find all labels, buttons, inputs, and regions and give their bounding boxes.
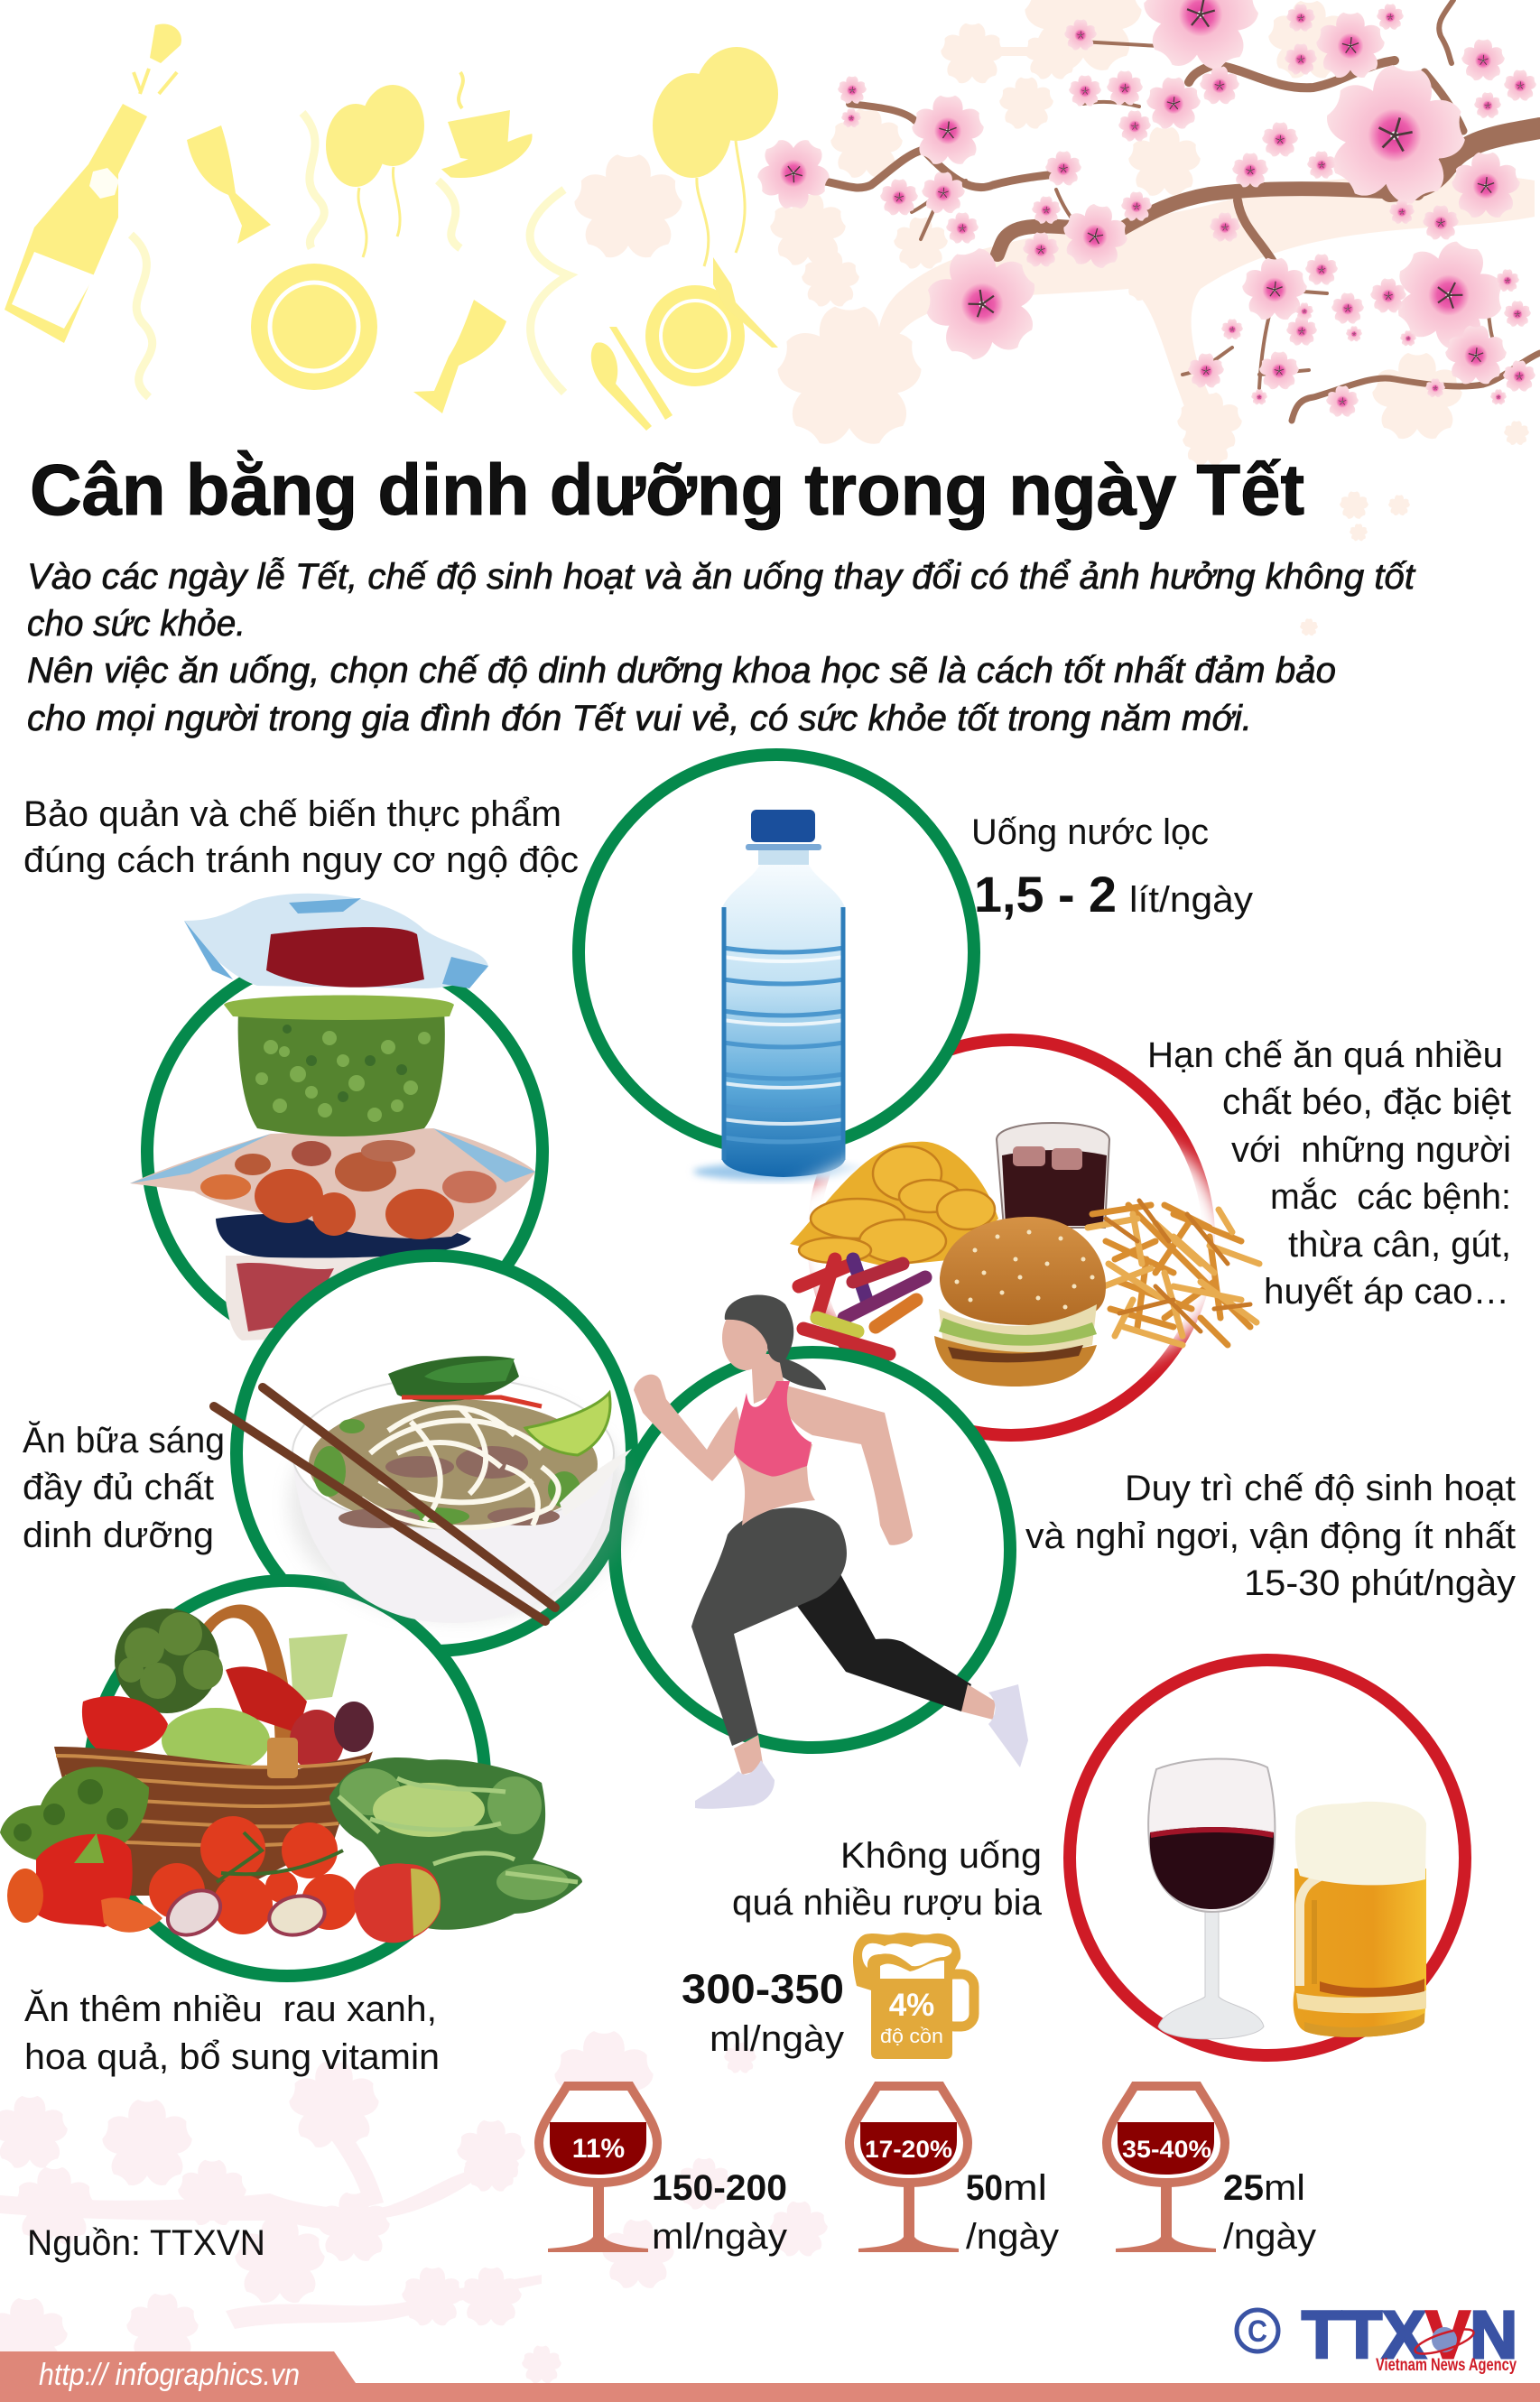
intro paragraph <box>27 556 1416 738</box>
icon: wine glass 17-20%: 17-20% <box>865 2136 952 2163</box>
beer figures: 300-350 <box>682 1966 844 2012</box>
plate left <box>251 264 377 390</box>
pale blossom branch, bottom background <box>0 2031 830 2386</box>
icon: wine glass 17-20% <box>849 2086 968 2252</box>
title: Cân bằng dinh dưỡng trong ngày Tết <box>30 450 1304 530</box>
intro paragraph: cho mọi người trong gia đình đón Tết vui vẻ, có sức khỏe tốt trong năm mới. <box>27 699 1252 738</box>
text: 150-200 ml/ngày: 150-200 <box>652 2168 787 2208</box>
pale streamers <box>131 113 569 397</box>
text: limit fat: mắc các bệnh: <box>1270 1176 1511 1217</box>
text: water: Uống nước lọc <box>971 812 1209 852</box>
photo: wine glass and beer mug <box>1148 1758 1426 2039</box>
text: food storage: đúng cách tránh nguy cơ ngộ độc <box>23 840 579 880</box>
flute <box>413 300 506 413</box>
text: food storage: Bảo quản và chế biến thực phẩm <box>23 794 561 834</box>
bottle <box>5 24 181 343</box>
cherry blossom flowers <box>740 0 1537 419</box>
text: exercise: 15-30 phút/ngày <box>1244 1563 1516 1603</box>
plate right <box>645 285 745 386</box>
ring: vegetables <box>89 1581 485 1976</box>
text: vegetables: Ăn thêm nhiều rau xanh, <box>24 1989 437 2029</box>
cherry blossom branches <box>825 0 1540 421</box>
intro paragraph: Nên việc ăn uống, chọn chế độ dinh dưỡng khoa học sẽ là cách tốt nhất đảm bảo <box>27 651 1336 691</box>
text: food storage <box>23 794 579 880</box>
background: pale blossom shapes top <box>571 0 1535 636</box>
text: 50ml/ngày: ml <box>1003 2168 1047 2208</box>
text: 50ml/ngày: /ngày <box>966 2217 1059 2257</box>
text: 25ml/ngày: /ngày <box>1223 2217 1316 2257</box>
text: water: 1,5 - 2 <box>974 866 1117 923</box>
text: exercise: Duy trì chế độ sinh hoạt <box>1125 1469 1516 1508</box>
icon: wine glass 35-40%: 35-40% <box>1122 2136 1211 2163</box>
text: limit fat: chất béo, đặc biệt <box>1222 1082 1511 1122</box>
text: vegetables <box>24 1989 440 2077</box>
photo: basket of vegetables <box>0 1605 582 1944</box>
text: water: lít/ngày <box>1129 880 1253 920</box>
text: alcohol: quá nhiều rượu bia <box>732 1883 1043 1923</box>
text: 150-200 ml/ngày <box>652 2168 787 2257</box>
photo: runner illustration <box>634 1294 1028 1809</box>
photo: pho bowl with chopsticks <box>214 1356 632 1623</box>
beer figures: ml/ngày <box>710 2019 844 2059</box>
text: 25ml/ngày: ml <box>1264 2168 1305 2208</box>
photo: burger, chips, cola, fries, candy <box>790 1119 1259 1386</box>
logo: copyright and TTXVN: TTXVN <box>1302 2297 1517 2372</box>
text: 25ml/ngày: 25 <box>1223 2168 1264 2208</box>
decorative yellow party icons <box>5 24 778 431</box>
text: 50ml/ngày <box>966 2168 1059 2257</box>
text: exercise: và nghỉ ngơi, vận động ít nhất <box>1025 1516 1516 1556</box>
spoon and knife <box>591 327 673 431</box>
icon: wine glass 11%: 11% <box>572 2134 625 2164</box>
text: limit fat: Hạn chế ăn quá nhiều <box>1147 1035 1503 1075</box>
text: water <box>971 812 1253 923</box>
icon: beer mug 4%: 4% <box>889 1988 934 2023</box>
ring: food storage <box>147 954 543 1349</box>
coffee cup <box>444 72 531 177</box>
big balloons <box>653 47 778 178</box>
champagne glass <box>187 125 271 244</box>
icon: wine glass 35-40% <box>1107 2086 1225 2252</box>
intro paragraph: cho sức khỏe. <box>27 604 246 644</box>
text: alcohol: Không uống <box>840 1836 1042 1876</box>
logo: copyright and TTXVN: C <box>1248 2314 1267 2349</box>
text: breakfast: dinh dưỡng <box>23 1516 214 1555</box>
ring: pho <box>237 1256 632 1651</box>
photo: water bottle <box>693 810 874 1181</box>
text: 150-200 ml/ngày: ml/ngày <box>652 2217 787 2257</box>
footer band: http:// infographics.vn <box>39 2358 300 2392</box>
ring: red fatty food <box>813 1040 1209 1435</box>
text: limit fat: với những người <box>1231 1130 1511 1170</box>
text: source: Nguồn: TTXVN <box>27 2223 265 2263</box>
text: 50ml/ngày: 50 <box>966 2168 1003 2208</box>
small balloons <box>326 85 424 187</box>
ring: running <box>615 1352 1010 1748</box>
text: breakfast: Ăn bữa sáng <box>23 1420 225 1461</box>
text: breakfast <box>23 1420 225 1555</box>
text: exercise <box>1025 1469 1516 1603</box>
ring: alcohol <box>1070 1660 1465 2055</box>
text: 25ml/ngày <box>1223 2168 1316 2257</box>
photo: stacked food containers <box>130 894 535 1340</box>
icon: beer mug 4% <box>853 1933 974 2059</box>
text: limit fat <box>1147 1035 1511 1312</box>
text: vegetables: hoa quả, bổ sung vitamin <box>24 2037 440 2077</box>
icon: beer mug 4%: độ cồn <box>880 2025 943 2047</box>
text: alcohol <box>732 1836 1043 1923</box>
icon: wine glass 11% <box>539 2086 657 2252</box>
text: breakfast: đầy đủ chất <box>23 1468 214 1507</box>
intro paragraph: Vào các ngày lễ Tết, chế độ sinh hoạt và ăn uống thay đổi có thể ảnh hưởng không tốt <box>27 556 1416 597</box>
fork <box>713 257 778 348</box>
text: limit fat: huyết áp cao… <box>1264 1272 1509 1312</box>
ring: water <box>579 755 974 1150</box>
footer band <box>0 2351 1540 2402</box>
beer figures <box>682 1966 844 2059</box>
text: limit fat: thừa cân, gút, <box>1288 1225 1511 1265</box>
